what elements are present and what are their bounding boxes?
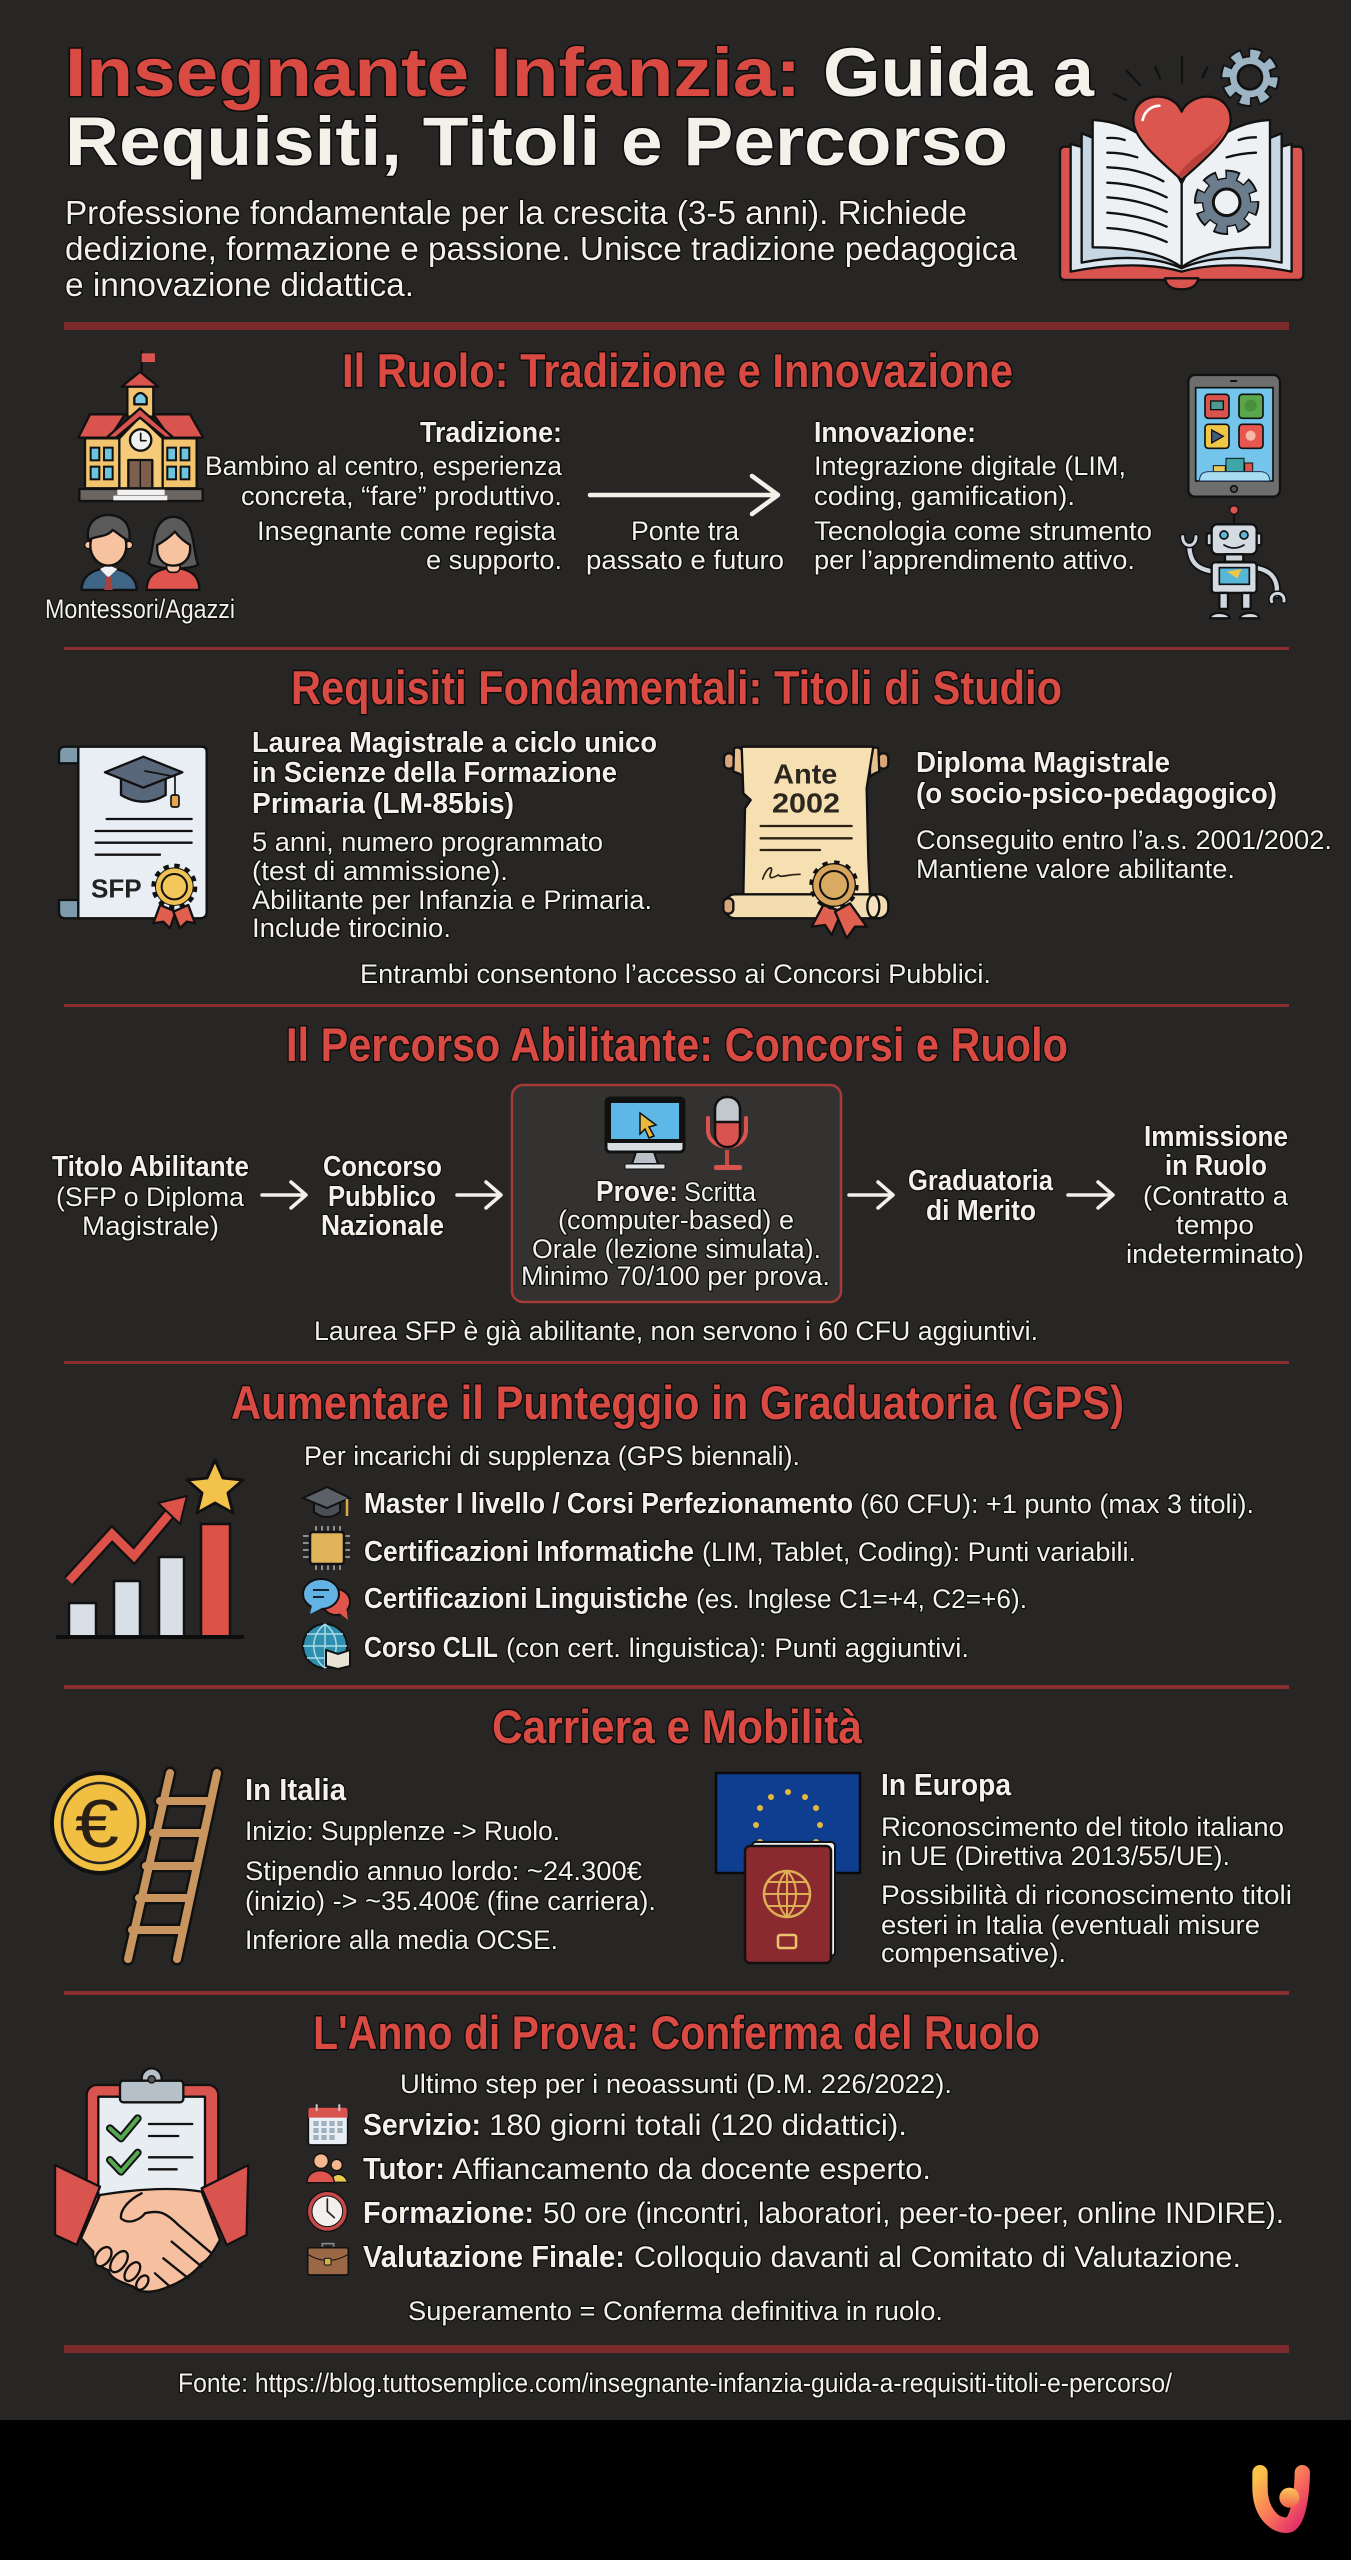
icon: globe and book bbox=[303, 1624, 350, 1669]
intro text: e innovazione didattica. bbox=[65, 266, 414, 303]
step: concorso: Concorso bbox=[323, 1151, 442, 1183]
step: immissione in ruolo: tempo bbox=[1176, 1210, 1254, 1240]
step: graduatoria: di Merito bbox=[926, 1195, 1036, 1227]
text block: laurea magistrale: Abilitante per Infanzia e Primaria. bbox=[252, 885, 652, 915]
box: prove: Prove: bbox=[596, 1176, 678, 1208]
text block: tradizione: Bambino al centro, esperienza bbox=[205, 451, 563, 481]
box: prove: Minimo 70/100 per prova. bbox=[521, 1261, 830, 1291]
item: master bbox=[303, 1487, 1254, 1520]
text block: in italia: Stipendio annuo lordo: ~24.300€ bbox=[245, 1856, 642, 1886]
icon: briefcase bbox=[308, 2244, 348, 2275]
box: prove: (computer-based) e bbox=[558, 1205, 794, 1235]
icon: euro coin: € bbox=[75, 1786, 119, 1862]
caption: ponte bbox=[586, 516, 784, 575]
arrow: tradizione to innovazione bbox=[590, 476, 778, 514]
arrow 2 bbox=[457, 1182, 501, 1208]
intro text bbox=[65, 194, 1018, 303]
text block: in europa: Riconoscimento del titolo italiano bbox=[881, 1812, 1284, 1842]
title: Requisiti, Titoli e Percorso bbox=[65, 103, 1008, 180]
intro text: dedizione, formazione e passione. Unisce tradizione pedagogica bbox=[65, 230, 1018, 267]
item: servizio: 180 giorni totali (120 didattici). bbox=[489, 2109, 907, 2142]
icon: school bbox=[78, 352, 203, 590]
item: certificazioni informatiche bbox=[303, 1526, 1136, 1570]
icon: SFP diploma: SFP bbox=[91, 873, 142, 903]
text block: innovazione: Tecnologia come strumento bbox=[814, 516, 1152, 546]
icon: computer bbox=[606, 1098, 684, 1169]
item: servizio: Servizio: bbox=[363, 2107, 481, 2142]
item: corso CLIL: (con cert. linguistica): Punti aggiuntivi. bbox=[506, 1633, 969, 1663]
item: valutazione finale: Valutazione Finale: bbox=[363, 2239, 625, 2274]
text block: tradizione: concreta, “fare” produttivo. bbox=[241, 481, 562, 511]
panel: il ruolo bbox=[45, 344, 1284, 624]
text block: in europa: in UE (Direttiva 2013/55/UE). bbox=[881, 1841, 1230, 1871]
text block: diploma magistrale: Conseguito entro l’a.s. 2001/2002. bbox=[916, 825, 1332, 855]
step: concorso: Nazionale bbox=[321, 1210, 444, 1242]
step: graduatoria: Graduatoria bbox=[908, 1165, 1054, 1197]
text block: tradizione: e supporto. bbox=[426, 545, 562, 575]
text block: in italia bbox=[245, 1772, 656, 1955]
box: prove: Orale (lezione simulata). bbox=[532, 1234, 821, 1264]
step: concorso: Pubblico bbox=[328, 1181, 436, 1213]
title: Insegnante Infanzia: bbox=[65, 34, 801, 111]
step: titolo abilitante: Magistrale) bbox=[82, 1211, 219, 1241]
icon: tablet bbox=[1188, 375, 1280, 497]
text block: in europa: Possibilità di riconoscimento titoli bbox=[881, 1880, 1292, 1910]
icon: calendar bbox=[308, 2104, 348, 2145]
icon: ante 2002 parchment: 2002 bbox=[772, 787, 840, 818]
item: master: (60 CFU): +1 punto (max 3 titoli). bbox=[860, 1489, 1254, 1519]
icon: clipboard and handshake bbox=[55, 2068, 248, 2292]
text block: laurea magistrale: Laurea Magistrale a ciclo unico bbox=[252, 727, 657, 759]
text block: in italia: (inizio) -> ~35.400€ (fine carriera). bbox=[245, 1886, 656, 1916]
item: valutazione finale bbox=[308, 2239, 1241, 2275]
arrow 3 bbox=[849, 1182, 893, 1208]
item: master: Master I livello / Corsi Perfezionamento bbox=[364, 1488, 853, 1520]
item: formazione: 50 ore (incontri, laboratori, peer-to-peer, online INDIRE). bbox=[543, 2197, 1284, 2230]
item: tutor: Affiancamento da docente esperto. bbox=[452, 2153, 931, 2186]
icon: ante 2002 parchment bbox=[723, 747, 888, 938]
step: immissione in ruolo: (Contratto a bbox=[1143, 1181, 1289, 1211]
text block: in europa: esteri in Italia (eventuali misure bbox=[881, 1910, 1260, 1940]
source line: Fonte: https://blog.tuttosemplice.com/insegnante-infanzia-guida-a-requisiti-titoli-e-percorso/ bbox=[178, 2368, 1172, 2398]
text block: in italia: Inferiore alla media OCSE. bbox=[245, 1925, 558, 1955]
item: certificazioni linguistiche: (es. Inglese C1=+4, C2=+6). bbox=[696, 1584, 1027, 1614]
intro: neoassunti: Ultimo step per i neoassunti (D.M. 226/2022). bbox=[400, 2069, 952, 2099]
icon: SFP diploma bbox=[59, 747, 207, 928]
text block: laurea magistrale: in Scienze della Formazione bbox=[252, 757, 617, 789]
step: titolo abilitante: Titolo Abilitante bbox=[52, 1151, 249, 1183]
step: concorso bbox=[321, 1151, 444, 1242]
item: valutazione finale: Colloquio davanti al Comitato di Valutazione. bbox=[634, 2241, 1241, 2274]
text block: innovazione: per l’apprendimento attivo. bbox=[814, 545, 1135, 575]
icon: euro coin bbox=[52, 1773, 148, 1873]
box: prove bbox=[512, 1085, 841, 1302]
text block: innovazione: Integrazione digitale (LIM, bbox=[814, 451, 1126, 481]
text block: in europa: In Europa bbox=[881, 1767, 1012, 1802]
heading: anno di prova: L'Anno di Prova: Conferma del Ruolo bbox=[313, 2006, 1040, 2059]
icon: chat bubbles bbox=[303, 1579, 350, 1620]
text block: diploma magistrale bbox=[916, 747, 1332, 884]
panel: anno di prova bbox=[55, 2006, 1284, 2326]
title bbox=[65, 34, 1095, 180]
item: servizio bbox=[308, 2104, 907, 2145]
heading: GPS: Aumentare il Punteggio in Graduatoria (GPS) bbox=[231, 1376, 1124, 1429]
icon: ante 2002 parchment: Ante bbox=[773, 758, 837, 789]
intro text: Professione fondamentale per la crescita (3-5 anni). Richiede bbox=[65, 194, 967, 231]
icon: graduation cap bbox=[303, 1487, 350, 1517]
item: certificazioni informatiche: Certificazioni Informatiche bbox=[364, 1536, 694, 1568]
heading: requisiti: Requisiti Fondamentali: Titoli di Studio bbox=[291, 661, 1062, 714]
text block: tradizione: Insegnante come regista bbox=[257, 516, 557, 546]
icon: growth chart bbox=[56, 1460, 244, 1639]
text block: in italia: Inizio: Supplenze -> Ruolo. bbox=[245, 1816, 560, 1846]
item: certificazioni linguistiche bbox=[303, 1579, 1027, 1620]
item: corso CLIL: Corso CLIL bbox=[364, 1632, 498, 1664]
text block: diploma magistrale: Diploma Magistrale bbox=[916, 747, 1170, 779]
note: concorsi pubblici: Entrambi consentono l’accesso ai Concorsi Pubblici. bbox=[360, 959, 991, 989]
intro: supplenze: Per incarichi di supplenza (GPS biennali). bbox=[304, 1441, 800, 1471]
step: graduatoria bbox=[908, 1165, 1054, 1227]
heading: il ruolo: Il Ruolo: Tradizione e Innovazione bbox=[342, 344, 1013, 397]
heading: carriera: Carriera e Mobilità bbox=[492, 1700, 863, 1753]
panel: punteggio GPS bbox=[56, 1376, 1254, 1669]
step: immissione in ruolo: Immissione bbox=[1144, 1121, 1288, 1153]
text block: diploma magistrale: Mantiene valore abilitante. bbox=[916, 854, 1235, 884]
arrow 4 bbox=[1068, 1182, 1113, 1208]
text block: laurea magistrale: (test di ammissione). bbox=[252, 856, 508, 886]
title: Guida a bbox=[823, 34, 1095, 111]
caption: ponte: Ponte tra bbox=[631, 516, 740, 546]
item: corso CLIL bbox=[303, 1624, 969, 1669]
icon: microphone bbox=[708, 1097, 746, 1170]
item: formazione bbox=[307, 2191, 1284, 2231]
header bbox=[65, 34, 1303, 303]
text block: tradizione bbox=[205, 417, 563, 575]
text block: innovazione: coding, gamification). bbox=[814, 481, 1075, 511]
note: laurea SFP: Laurea SFP è già abilitante, non servono i 60 CFU aggiuntivi. bbox=[314, 1316, 1038, 1346]
panel: requisiti bbox=[59, 661, 1332, 989]
text block: tradizione: Tradizione: bbox=[420, 417, 562, 449]
text block: laurea magistrale: 5 anni, numero programmato bbox=[252, 827, 603, 857]
text block: laurea magistrale bbox=[252, 727, 657, 943]
text block: diploma magistrale: (o socio-psico-pedagogico) bbox=[916, 778, 1277, 810]
icon: logo bbox=[1260, 2473, 1302, 2525]
text block: laurea magistrale: Primaria (LM-85bis) bbox=[252, 788, 514, 820]
icon: robot bbox=[1183, 506, 1284, 618]
icon: chip bbox=[303, 1526, 350, 1570]
icon: EU flag and passport bbox=[716, 1773, 860, 1963]
text block: in italia: In Italia bbox=[245, 1772, 347, 1807]
icon: book with heart and gears bbox=[1060, 54, 1303, 289]
caption: ponte: passato e futuro bbox=[586, 545, 784, 575]
text block: innovazione bbox=[814, 417, 1152, 575]
caption: montessori: Montessori/Agazzi bbox=[45, 594, 235, 624]
step: immissione in ruolo bbox=[1126, 1121, 1304, 1269]
panel: carriera e mobilita bbox=[52, 1700, 1292, 1968]
text block: in europa: compensative). bbox=[881, 1938, 1066, 1968]
item: formazione: Formazione: bbox=[363, 2195, 534, 2230]
step: titolo abilitante: (SFP o Diploma bbox=[56, 1182, 245, 1212]
icon: clock bbox=[307, 2191, 347, 2231]
heading: percorso: Il Percorso Abilitante: Concorsi e Ruolo bbox=[286, 1018, 1068, 1071]
step: titolo abilitante bbox=[52, 1151, 249, 1241]
arrow 1 bbox=[262, 1182, 306, 1208]
item: certificazioni informatiche: (LIM, Tablet, Coding): Punti variabili. bbox=[702, 1537, 1136, 1567]
step: immissione in ruolo: in Ruolo bbox=[1165, 1150, 1267, 1182]
box: prove: Scritta bbox=[684, 1177, 757, 1207]
text block: innovazione: Innovazione: bbox=[814, 417, 976, 449]
icon: tutor people bbox=[307, 2154, 348, 2183]
icon: ladder bbox=[128, 1773, 217, 1959]
item: tutor: Tutor: bbox=[363, 2151, 445, 2186]
text block: in europa bbox=[881, 1767, 1292, 1968]
step: immissione in ruolo: indeterminato) bbox=[1126, 1239, 1304, 1269]
text block: laurea magistrale: Include tirocinio. bbox=[252, 913, 451, 943]
item: certificazioni linguistiche: Certificazioni Linguistiche bbox=[364, 1583, 688, 1615]
panel: percorso abilitante bbox=[52, 1018, 1304, 1346]
note: superamento: Superamento = Conferma definitiva in ruolo. bbox=[408, 2296, 943, 2326]
